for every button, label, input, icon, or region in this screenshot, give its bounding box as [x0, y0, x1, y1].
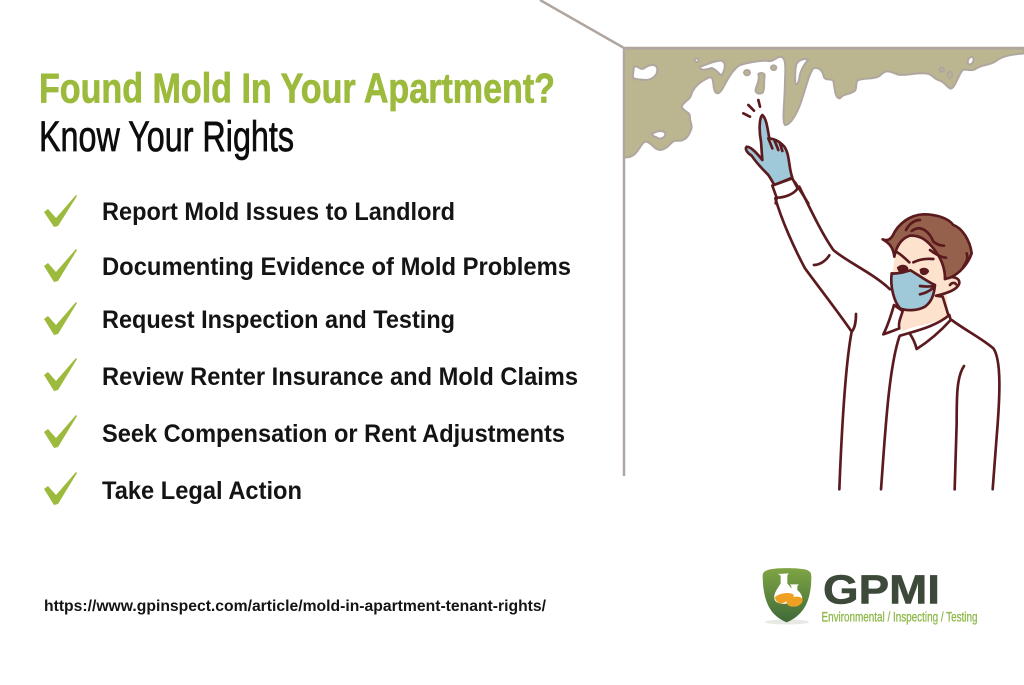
- mask folds: [920, 286, 933, 294]
- GPMI logo: [763, 566, 978, 624]
- item: request inspection: Request Inspection and Testing: [102, 306, 455, 334]
- face and neck: [893, 237, 948, 332]
- title: Know Your Rights: [39, 113, 294, 161]
- checklist: [44, 195, 578, 505]
- mold holes: [633, 56, 975, 139]
- face mask: [891, 270, 935, 310]
- eyes: [897, 265, 929, 275]
- mold spots: [744, 65, 952, 94]
- item: legal action: [44, 472, 302, 505]
- glove: [746, 115, 792, 185]
- illustration: man's head with mask: [883, 214, 972, 349]
- title: [39, 64, 555, 161]
- title: Found Mold In Your Apartment?: [39, 64, 555, 112]
- source url: https://www.gpinspect.com/article/mold-in-apartment-tenant-rights/: [44, 598, 547, 615]
- item: documenting evidence: Documenting Evidence of Mold Problems: [102, 253, 571, 281]
- mold on ceiling: [624, 49, 1024, 157]
- shirt body: [881, 337, 899, 489]
- hair strands: [906, 220, 967, 267]
- illustration: man's shirt and raised arm: [775, 187, 999, 489]
- item: legal action: Take Legal Action: [102, 477, 302, 505]
- logo shadow: [765, 620, 809, 624]
- emphasis ticks: [743, 100, 760, 117]
- room corner lines: [540, 0, 1024, 476]
- logo wordmark: GPMI: [823, 566, 940, 612]
- gloved hand pointing: [743, 100, 808, 203]
- raised arm: [775, 198, 856, 489]
- left collar: [883, 305, 903, 334]
- hair: [883, 214, 972, 279]
- item: seek compensation: Seek Compensation or Rent Adjustments: [102, 420, 565, 448]
- item: request inspection: [44, 302, 455, 335]
- logo shield: [763, 568, 811, 622]
- ear and jaw: [936, 277, 959, 315]
- item: report mold issues: Report Mold Issues to Landlord: [102, 198, 455, 226]
- brows: [897, 252, 933, 262]
- shirt cuff: [772, 178, 798, 198]
- item: renter insurance: Review Renter Insurance and Mold Claims: [102, 363, 578, 391]
- flasks: [774, 573, 795, 604]
- right collar: [909, 315, 951, 349]
